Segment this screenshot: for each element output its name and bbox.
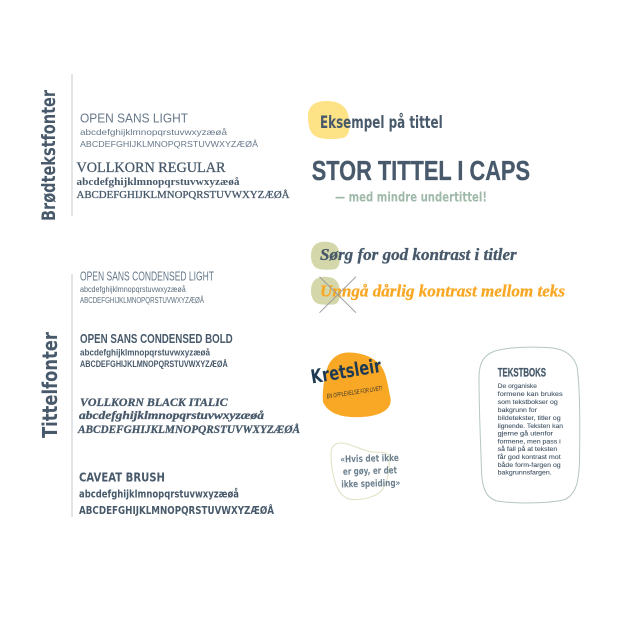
subtitle: — med mindre undertittel! (335, 190, 487, 206)
shape: yellow blob (308, 101, 350, 139)
font sample: Open Sans Condensed Light: abcdefghijklmnopqrstuvwxyzæøå (80, 285, 186, 294)
badge: Kretsleir (309, 352, 391, 417)
example: good contrast (311, 242, 517, 270)
heading: body fonts: Brødtekstfonter (38, 90, 60, 221)
good contrast title: Sørg for god kontrast i titler (320, 245, 517, 264)
font sample: Open Sans Condensed Light: OPEN SANS CONDENSED LIGHT (80, 270, 214, 284)
font sample: Vollkorn Regular: VOLLKORN REGULAR (76, 160, 226, 176)
bad contrast title: Unngå dårlig kontrast mellom teks (320, 282, 565, 301)
example: big caps title (312, 155, 530, 206)
text box body: så fall på at teksten (498, 445, 558, 453)
font sample: Open Sans Condensed Light (80, 270, 214, 305)
text box body: lignende. Teksten kan (498, 423, 563, 430)
text box body: De organiske (498, 383, 537, 390)
quote in outline shape (331, 443, 400, 500)
font sample: Caveat Brush: ABCDEFGHIJKLMNOPQRSTUVWXYZÆØÅ (79, 504, 274, 517)
quote text: ikke speiding» (341, 478, 400, 490)
font sample: Caveat Brush (79, 470, 274, 517)
text box body: både form-fargen og (498, 461, 561, 469)
font sample: Open Sans Light: ABCDEFGHIJKLMNOPQRSTUVWXYZÆØÅ (80, 139, 258, 149)
font sample: Open Sans Light (80, 111, 258, 149)
text box body: gjerne gå utenfor (498, 430, 554, 438)
shape: outline blob (331, 443, 389, 500)
shape: outlined rounded box (479, 347, 580, 503)
font sample: Open Sans Condensed Bold: OPEN SANS CONDENSED BOLD (80, 332, 233, 346)
text box body: bildetekster, titler og (498, 415, 561, 422)
font sample: Vollkorn Black Italic (77, 397, 300, 436)
font sample: Vollkorn Black Italic: VOLLKORN BLACK ITALIC (80, 397, 228, 409)
font sample: Vollkorn Regular (76, 160, 290, 201)
font sample: Open Sans Light: abcdefghijklmnopqrstuvwxyzæøå (80, 127, 227, 137)
text box (479, 347, 580, 503)
example: title on yellow shape (308, 101, 443, 139)
panel: body fonts (38, 74, 290, 221)
icon: cross (320, 277, 356, 313)
shape: orange blob (323, 352, 391, 417)
quote text: «Hvis det ikke (340, 453, 399, 465)
panel: title fonts (38, 270, 300, 517)
example: bad contrast (311, 277, 565, 313)
text box body: får god kontrast mot (498, 453, 561, 461)
quote text: er gøy, er det (343, 465, 397, 478)
font sample: Open Sans Condensed Bold: abcdefghijklmnopqrstuvwxyzæøå (80, 348, 211, 358)
shape: olive blob (311, 242, 340, 270)
font sample: Caveat Brush: abcdefghijklmnopqrstuvwxyzæøå (79, 488, 239, 501)
badge title: Kretsleir (309, 355, 383, 388)
text box body: bakgrunn for (498, 407, 538, 414)
font sample: Caveat Brush: CAVEAT BRUSH (79, 470, 165, 485)
text box heading: TEKSTBOKS (498, 368, 546, 380)
font sample: Vollkorn Regular: abcdefghijklmnopqrstuvwxyzæøå (76, 176, 240, 188)
font sample: Vollkorn Regular: ABCDEFGHIJKLMNOPQRSTUVWXYZÆØÅ (76, 189, 290, 201)
font sample: Vollkorn Black Italic: abcdefghijklmnopqrstuvwxyzæøå (79, 408, 264, 422)
quote text (340, 453, 400, 490)
badge tagline: EN OPPLEVELSE FOR LIVET! (326, 385, 383, 400)
text box body: formene, men pass i (498, 438, 561, 446)
shape: olive blob (311, 277, 340, 305)
text box body (498, 383, 564, 476)
font sample: Open Sans Condensed Light: ABCDEFGHIJKLMNOPQRSTUVWXYZÆØÅ (80, 296, 205, 305)
text box body: formene kan brukes (498, 391, 564, 398)
text box body: som tekstbokser og (498, 399, 558, 406)
heading: title fonts: Tittelfonter (38, 332, 62, 438)
font sample: Open Sans Light: OPEN SANS LIGHT (80, 111, 188, 126)
font sample: Open Sans Condensed Bold: ABCDEFGHIJKLMNOPQRSTUVWXYZÆØÅ (80, 359, 228, 369)
title example: Eksempel på tittel (320, 113, 443, 132)
font sample: Vollkorn Black Italic: ABCDEFGHIJKLMNOPQRSTUVWXYZÆØÅ (77, 422, 300, 436)
big title: STOR TITTEL I CAPS (312, 155, 530, 186)
font sample: Open Sans Condensed Bold (80, 332, 233, 369)
text box body: bakgrunnsfargen. (498, 470, 552, 476)
